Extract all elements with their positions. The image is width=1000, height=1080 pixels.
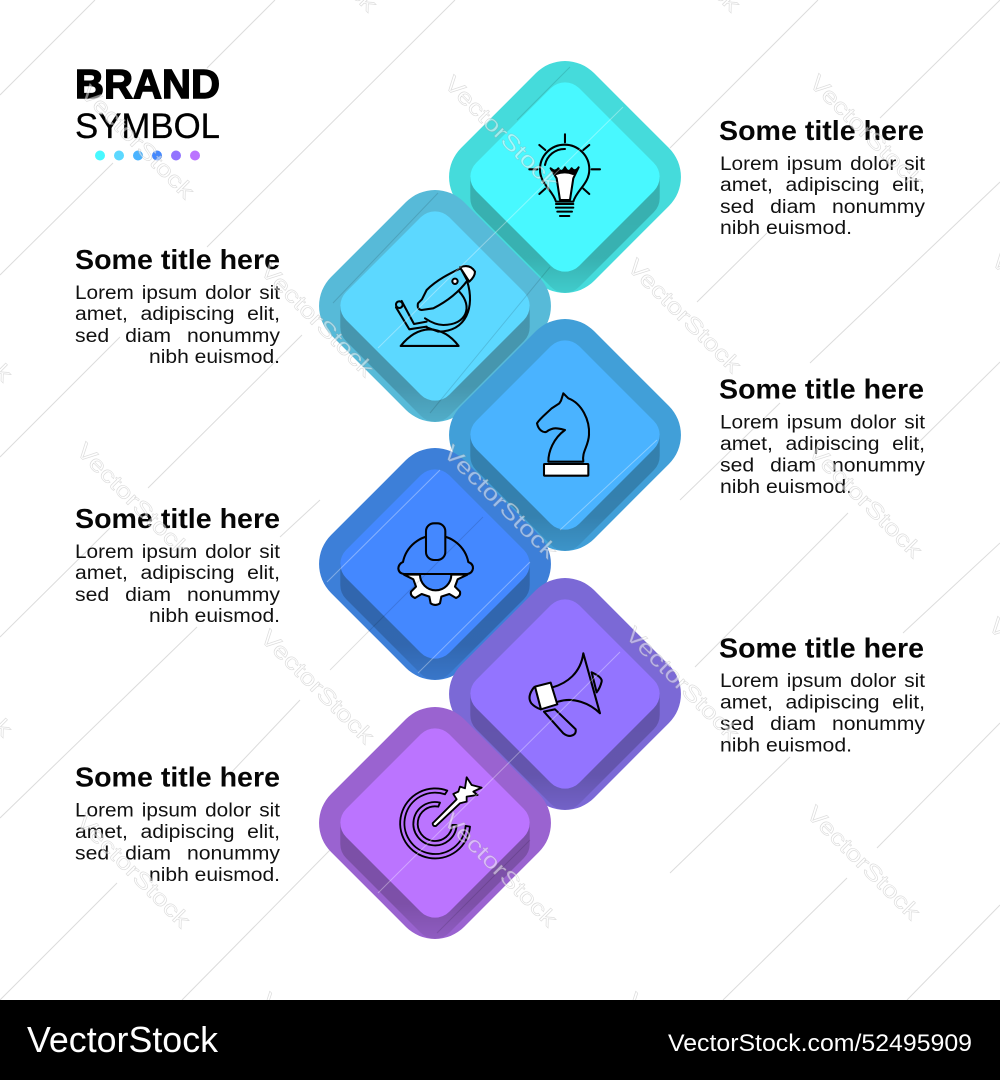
logo: brand symbol (75, 61, 220, 160)
text block: right 3 (719, 632, 926, 756)
body text: nibh euismod. (149, 606, 280, 627)
body text (720, 154, 926, 239)
body text (75, 283, 281, 368)
watermark: repeated VectorStock text: VectorStock (439, 71, 564, 195)
body text: Lorem ipsum dolor sit (720, 412, 926, 434)
watermark: repeated VectorStock text: VectorStock (804, 70, 929, 194)
text block: right 1 (719, 115, 926, 239)
body text: nibh euismod. (720, 218, 852, 239)
text block: right 2 (719, 374, 926, 498)
watermark: repeated VectorStock text: VectorStock (803, 439, 928, 563)
footer brand: VectorStock (27, 1019, 219, 1060)
body text: amet, adipiscing elit, (720, 692, 925, 714)
panel: step 2 diamond, microscope (302, 173, 568, 439)
watermark: repeated VectorStock text: VectorStock (622, 254, 747, 378)
heading: Some title here (75, 762, 280, 792)
body text: sed diam nonummy (75, 326, 281, 347)
body text: Lorem ipsum dolor sit (720, 671, 926, 692)
watermark: repeated VectorStock text: VectorStock (75, 80, 200, 204)
body text (75, 542, 281, 627)
body text (720, 412, 926, 498)
watermark: repeated VectorStock text: VectorStock (71, 438, 196, 562)
body text: nibh euismod. (720, 477, 852, 498)
body text: sed diam nonummy (720, 714, 926, 735)
heading: Some title here (719, 374, 924, 404)
logo word: BRAND: BRAND (75, 61, 220, 107)
icon: light bulb (529, 134, 600, 216)
text block: left 1 (75, 244, 281, 368)
heading: Some title here (719, 632, 924, 664)
heading: Some title here (719, 115, 924, 146)
body text: sed diam nonummy (720, 197, 926, 218)
watermark: repeated VectorStock text: VectorStock (438, 808, 563, 932)
body text: sed diam nonummy (720, 456, 926, 476)
body text: Lorem ipsum dolor sit (75, 283, 281, 304)
icon: target with arrow (400, 777, 482, 858)
body text: amet, adipiscing elit, (75, 563, 280, 584)
watermark: repeated VectorStock text: VectorStock (71, 809, 196, 933)
text block: left 2 (75, 503, 281, 627)
body text: Lorem ipsum dolor sit (75, 800, 281, 822)
footer bar (0, 1000, 1000, 1080)
watermark: repeated VectorStock text: VectorStock (255, 625, 380, 749)
watermark: repeated VectorStock text: VectorStock (620, 622, 745, 746)
logo word: SYMBOL: SYMBOL (75, 106, 220, 146)
body text: amet, adipiscing elit, (720, 175, 925, 196)
body text: sed diam nonummy (75, 844, 281, 864)
heading: Some title here (75, 503, 280, 534)
panel: step 6 diamond, target with arrow (302, 690, 568, 956)
body text (75, 800, 281, 886)
body text: Lorem ipsum dolor sit (75, 542, 281, 563)
watermark: repeated VectorStock text: VectorStock (801, 801, 926, 925)
icon: microscope (396, 266, 475, 346)
icon: chess knight (537, 393, 589, 476)
icon: hard hat with gear (398, 523, 473, 605)
logo colour dots (95, 150, 200, 160)
watermark: repeated VectorStock text: VectorStock (438, 440, 563, 564)
text block: left 3 (75, 762, 281, 886)
body text: Lorem ipsum dolor sit (720, 154, 926, 175)
body text: sed diam nonummy (75, 585, 281, 606)
panel: step 4 diamond, hard hat with gear (302, 431, 568, 697)
footer image id: VectorStock.com/52495909 (668, 1030, 972, 1057)
panel: step 3 diamond, chess knight (432, 302, 698, 568)
body text (720, 671, 926, 756)
body text: amet, adipiscing elit, (75, 822, 280, 843)
body text: nibh euismod. (720, 736, 852, 756)
body text: amet, adipiscing elit, (75, 304, 280, 325)
panel: step 5 diamond, megaphone (432, 561, 698, 827)
body text: amet, adipiscing elit, (720, 434, 925, 455)
body text: nibh euismod. (149, 865, 280, 886)
body text: nibh euismod. (149, 347, 280, 368)
heading: Some title here (75, 244, 280, 275)
panel: step 1 diamond, light bulb (432, 44, 698, 310)
watermark: repeated VectorStock text: VectorStock (255, 258, 380, 382)
icon: megaphone (529, 653, 602, 736)
